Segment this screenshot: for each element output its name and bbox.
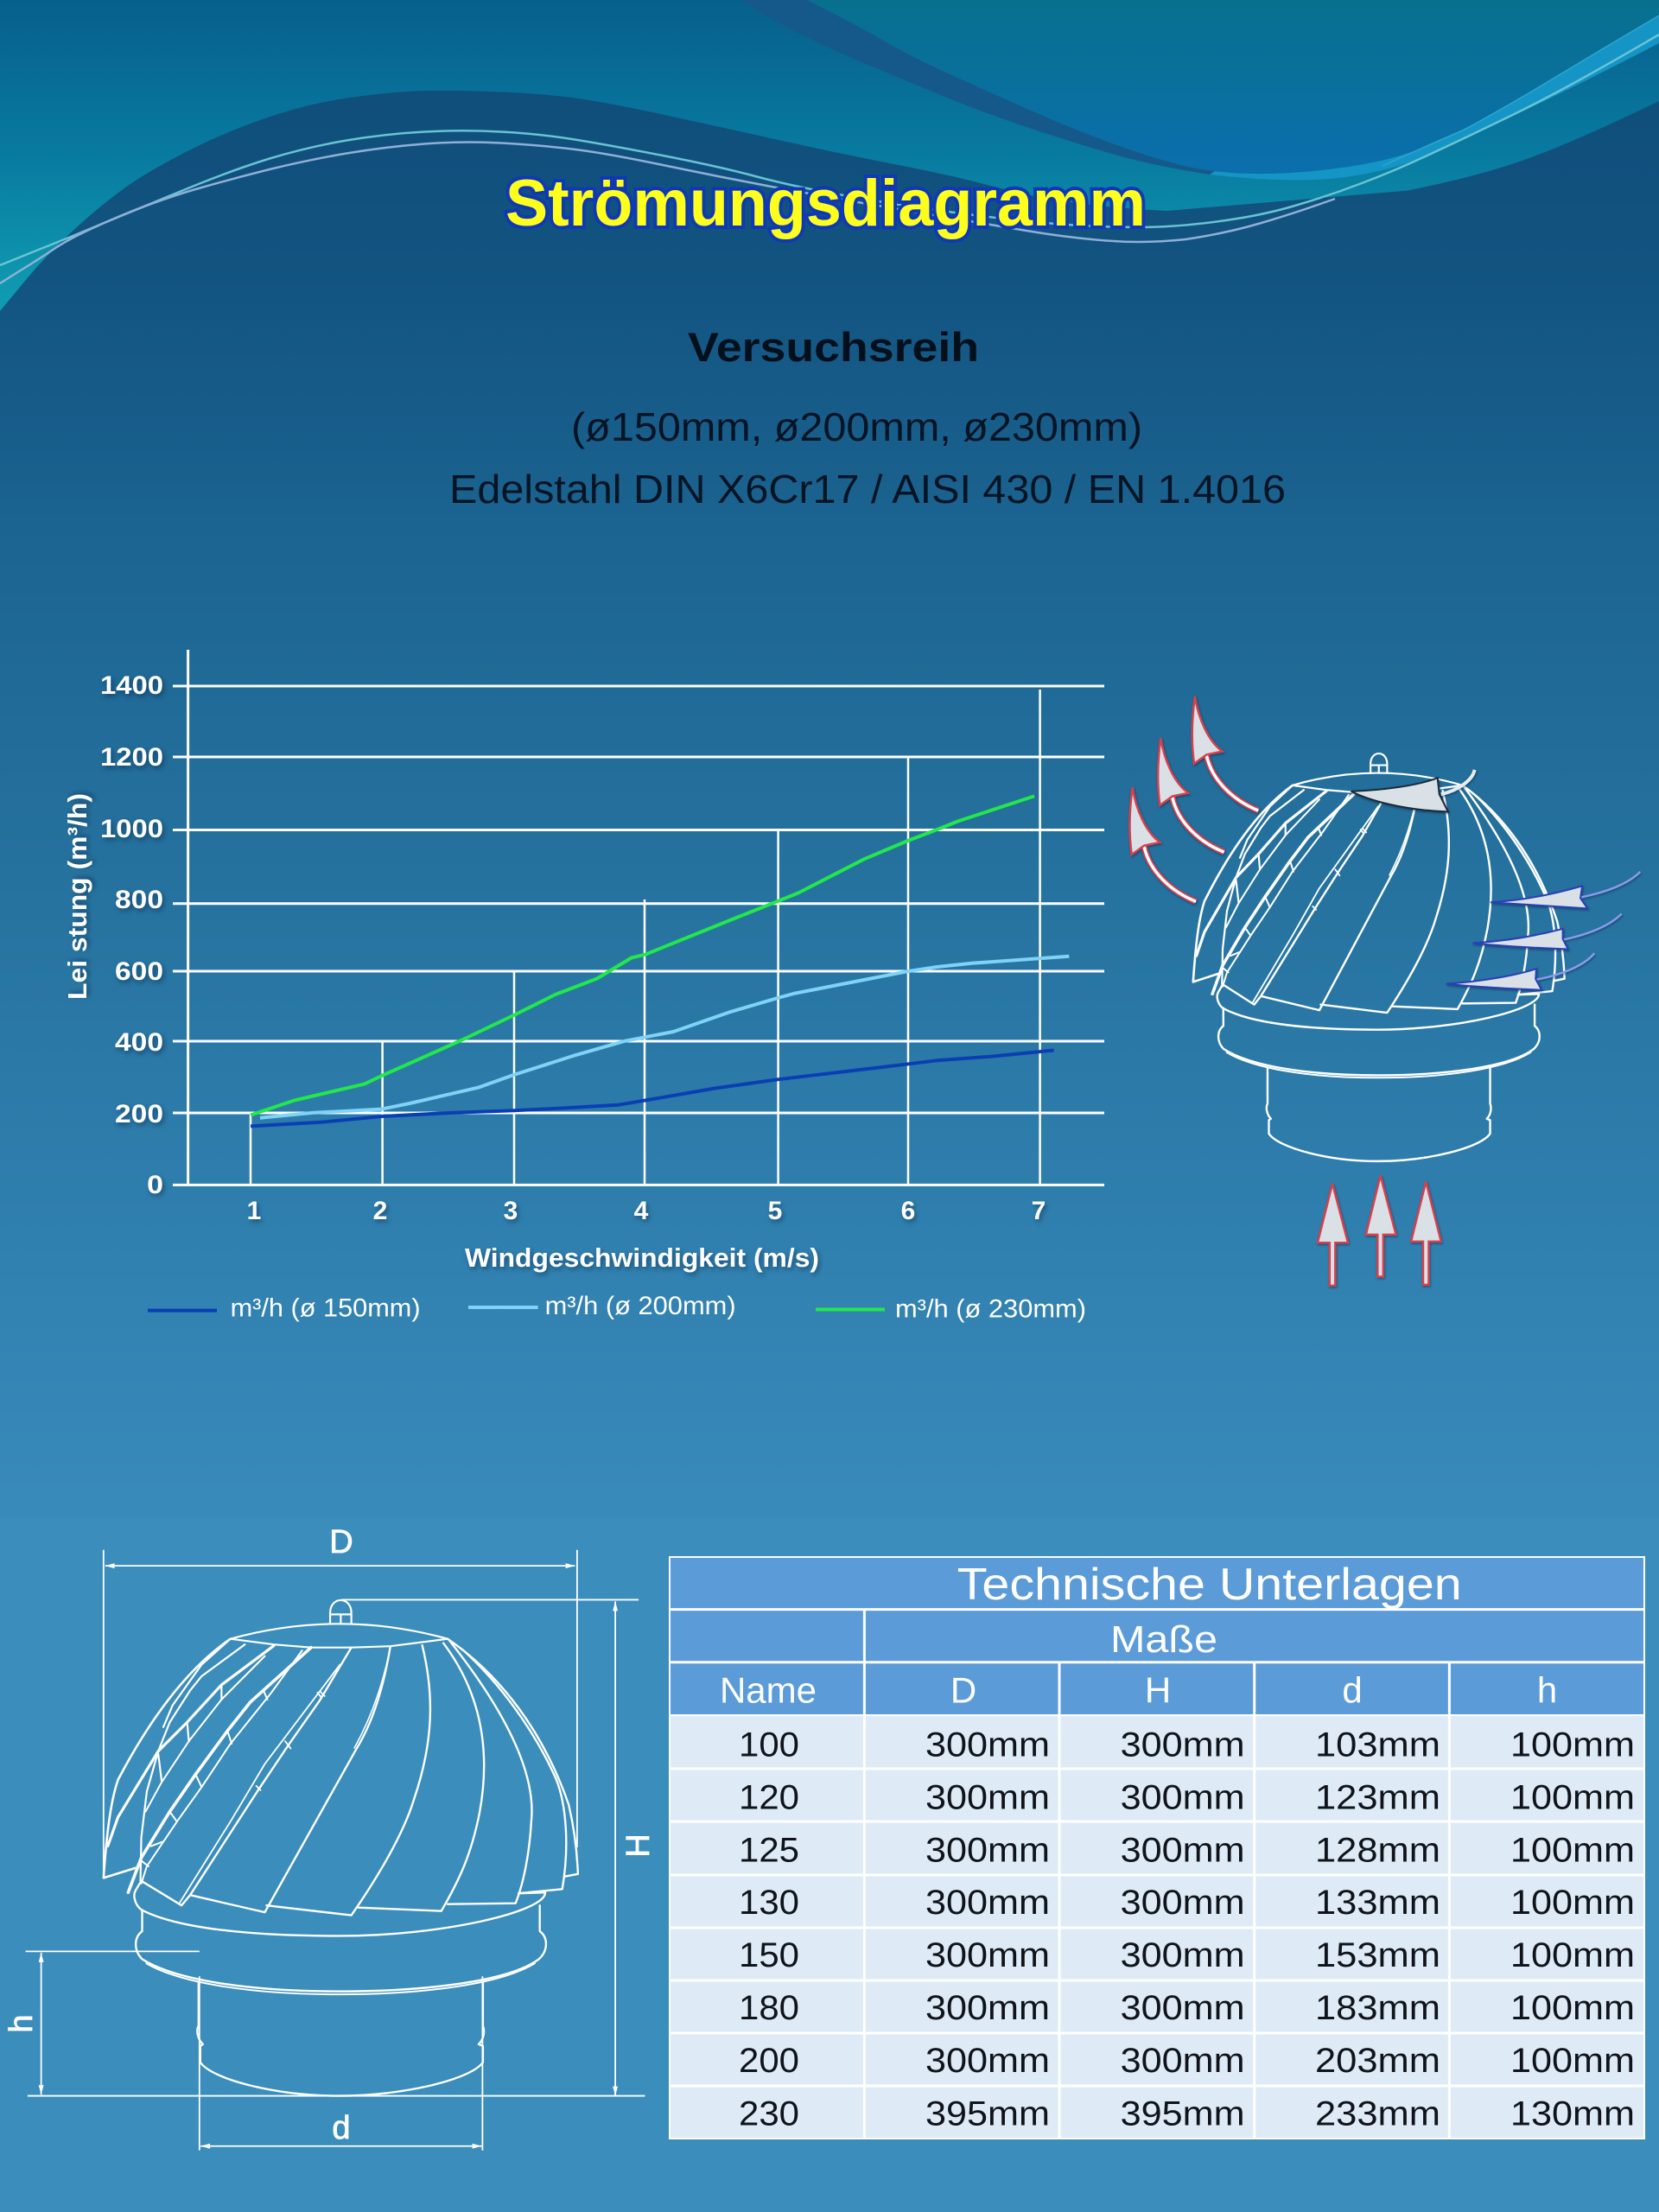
y axis tick labels: 600 [115, 957, 163, 986]
row 100: 103mm [1315, 1726, 1440, 1764]
series: 150mm [251, 1051, 1054, 1126]
row 230: 230 [739, 2094, 799, 2133]
y axis tick labels [100, 671, 163, 1199]
header row: D [950, 1669, 976, 1711]
legend: m³/h (ø 150mm) [231, 1294, 421, 1323]
row 150: 100mm [1510, 1936, 1635, 1974]
turbine vent outline [104, 1600, 578, 2096]
row 230: 395mm [1121, 2094, 1245, 2133]
legend: m³/h (ø 230mm) [895, 1295, 1086, 1324]
header row: H [1145, 1669, 1171, 1711]
y axis title: Lei stung (m³/h) [62, 793, 92, 1000]
row 130 [739, 1884, 1635, 1922]
row 130: 300mm [1121, 1884, 1245, 1922]
row 150: 300mm [1121, 1936, 1245, 1974]
row 130: 100mm [1510, 1884, 1635, 1922]
table cells and rules [669, 1556, 1645, 2139]
legend [148, 1292, 1086, 1324]
row 130: 133mm [1315, 1884, 1440, 1922]
y axis tick labels: 800 [115, 886, 163, 914]
table: technical data [669, 1556, 1645, 2139]
turbine vent line drawing [1193, 753, 1565, 1161]
x axis tick labels: 1 [247, 1197, 261, 1225]
series: 230mm [251, 796, 1034, 1115]
row 100: 100 [739, 1726, 799, 1764]
y axis tick labels: 200 [115, 1100, 163, 1128]
x axis tick labels: 2 [373, 1197, 387, 1225]
row 125: 300mm [1121, 1832, 1245, 1870]
label H: H [620, 1834, 657, 1858]
x axis tick labels: 7 [1032, 1197, 1046, 1225]
row 120 [739, 1779, 1635, 1817]
row 120: 120 [739, 1779, 799, 1817]
row 230 [739, 2094, 1635, 2133]
y axis tick labels: 0 [147, 1171, 163, 1199]
row 150: 150 [739, 1936, 799, 1974]
row 180: 300mm [925, 1989, 1050, 2027]
row 125: 100mm [1510, 1832, 1635, 1870]
airflow illustration [1129, 696, 1640, 1286]
y axis tick labels: 1400 [100, 671, 163, 700]
subtitle: Versuchsreih [688, 324, 979, 370]
row 200: 203mm [1315, 2042, 1440, 2080]
row 150: 300mm [925, 1936, 1050, 1974]
exhaust arrows [1129, 696, 1258, 901]
text: model sizes: (ø150mm, ø200mm, ø230mm) [571, 404, 1142, 449]
row 100: 300mm [925, 1726, 1050, 1764]
line chart [62, 650, 1104, 1324]
title: Strömungsdiagramm [505, 167, 1146, 240]
x axis tick labels: 3 [504, 1197, 518, 1225]
x axis tick labels: 5 [768, 1197, 782, 1225]
row 180: 100mm [1510, 1989, 1635, 2027]
header row: d [1342, 1669, 1363, 1711]
series: 200mm [260, 957, 1069, 1118]
row 200: 300mm [925, 2042, 1050, 2080]
intake arrows [1318, 1175, 1441, 1286]
dimension drawing [3, 1524, 657, 2151]
x axis tick labels [247, 1197, 1046, 1225]
row 150: 153mm [1315, 1936, 1440, 1974]
row 125: 128mm [1315, 1832, 1440, 1870]
panel: dimension drawing background [0, 1518, 1659, 2212]
row 230: 395mm [925, 2094, 1050, 2133]
y axis tick labels: 1200 [100, 743, 163, 772]
row 230: 233mm [1315, 2094, 1440, 2133]
row 230: 130mm [1510, 2094, 1635, 2133]
header row: Name [720, 1669, 817, 1711]
header: Maße: Maße [1110, 1618, 1217, 1661]
row 130: 130 [739, 1884, 799, 1922]
legend: m³/h (ø 200mm) [545, 1292, 736, 1320]
label D: D [329, 1524, 353, 1560]
x axis title: Windgeschwindigkeit (m/s) [465, 1243, 819, 1273]
label d: d [332, 2110, 351, 2146]
row 200: 200 [739, 2042, 799, 2080]
row 120: 100mm [1510, 1779, 1635, 1817]
header wave artwork [0, 0, 1659, 346]
label h: h [3, 2014, 40, 2033]
row 180: 183mm [1315, 1989, 1440, 2027]
row 180: 180 [739, 1989, 799, 2027]
wind arrows [1446, 872, 1640, 990]
swirl arrow on lid [1351, 770, 1475, 812]
row 120: 300mm [1121, 1779, 1245, 1817]
y axis tick labels: 400 [115, 1028, 163, 1057]
row 125: 125 [739, 1832, 799, 1870]
header row [720, 1669, 1557, 1711]
chart grid and axes [173, 650, 1104, 1185]
y axis tick labels: 1000 [100, 815, 163, 843]
row 125: 300mm [925, 1832, 1050, 1870]
row 150 [739, 1936, 1635, 1974]
row 120: 300mm [925, 1779, 1050, 1817]
row 100 [739, 1726, 1635, 1764]
row 125 [739, 1832, 1635, 1870]
row 180 [739, 1989, 1635, 2027]
dimension lines [25, 1550, 645, 2151]
header row: h [1537, 1669, 1557, 1711]
row 180: 300mm [1121, 1989, 1245, 2027]
x axis tick labels: 6 [901, 1197, 915, 1225]
row 200: 100mm [1510, 2042, 1635, 2080]
row 100: 100mm [1510, 1726, 1635, 1764]
table title: Technische Unterlagen [957, 1560, 1462, 1610]
row 120: 123mm [1315, 1779, 1440, 1817]
text: material: Edelstahl DIN X6Cr17 / AISI 430 / EN 1.4016 [449, 467, 1286, 512]
x axis tick labels: 4 [634, 1197, 649, 1225]
row 100: 300mm [1121, 1726, 1245, 1764]
row 130: 300mm [925, 1884, 1050, 1922]
row 200: 300mm [1121, 2042, 1245, 2080]
row 200 [739, 2042, 1635, 2080]
